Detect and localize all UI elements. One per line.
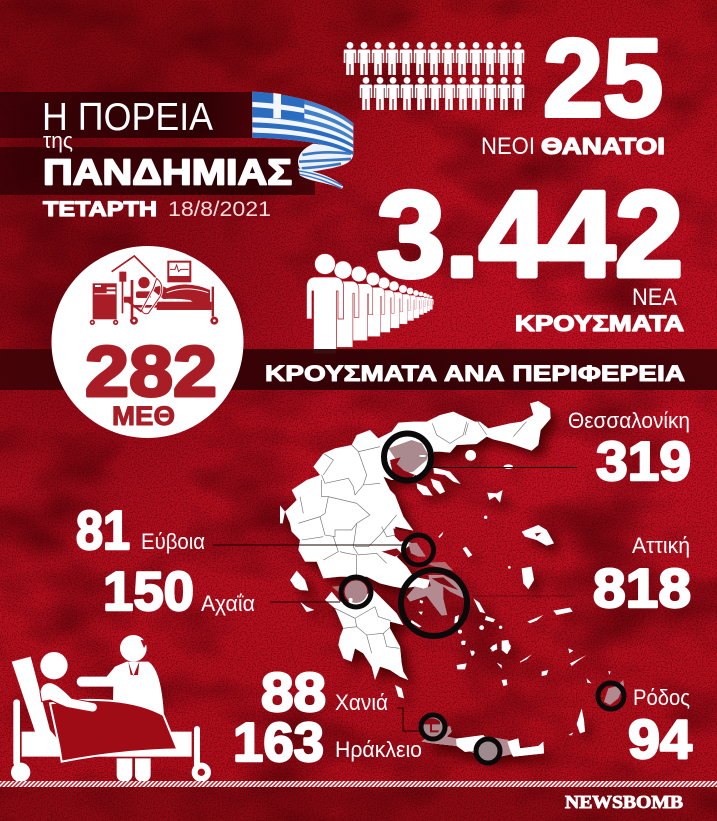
icon: queue of people — [306, 254, 434, 354]
stat: deaths: 25 — [543, 17, 663, 140]
islands: Dodecanese and Crete — [422, 640, 611, 758]
region: Crete and Rhodes — [422, 680, 624, 761]
title block: ΤΕΤΑΡΤΗ — [43, 198, 157, 221]
label: Thessaloniki: Θεσσαλονίκη — [568, 408, 690, 433]
label: Achaia: 150 — [103, 560, 194, 622]
icon: nurse and patient in bed — [11, 630, 211, 782]
region: Achaia — [345, 580, 367, 603]
title block: της — [43, 128, 73, 153]
label: Attica: Αττική — [632, 533, 690, 558]
ICU badge: ΜΕΘ — [112, 401, 175, 431]
stat: deaths: ΝΕΟΙ — [481, 133, 535, 160]
label: Euboea: Εύβοια — [141, 529, 205, 554]
label: Achaia: Αχαΐα — [201, 591, 255, 616]
stat: deaths — [481, 17, 665, 160]
icon: greek flag ribbon — [252, 92, 353, 189]
ICU badge — [52, 246, 244, 438]
label: Attica: 818 — [593, 557, 691, 619]
label: Attica — [593, 533, 691, 619]
region fills — [332, 440, 453, 603]
title block: ΠΑΝΔΗΜΙΑΣ — [43, 152, 292, 192]
label: Chania — [261, 661, 388, 723]
label: Rhodes: Ρόδος — [633, 685, 690, 710]
label: Rhodes: 94 — [628, 708, 692, 770]
label: Heraklion: 163 — [233, 711, 324, 773]
map of Greece — [280, 401, 624, 761]
region: Attica — [407, 575, 464, 627]
hatched divider — [0, 781, 717, 787]
logo: Newsbomb: NEWSBOMB — [565, 792, 683, 812]
label: Euboea: 81 — [76, 499, 130, 561]
label: Chania: Χανιά — [335, 690, 388, 715]
deaths pictogram: 25 figures — [344, 42, 524, 110]
label: Heraklion — [233, 711, 422, 773]
gulf and sea cut-outs — [382, 528, 542, 557]
heading band: cases by region — [0, 349, 717, 390]
region borders — [298, 420, 527, 577]
label: Thessaloniki — [568, 408, 691, 492]
region: Thessaloniki — [388, 440, 428, 473]
highlight circles — [341, 434, 624, 763]
mainland and islands — [280, 401, 611, 758]
title block: 18/8/2021 — [168, 198, 271, 221]
label: Achaia — [103, 560, 255, 622]
stat: new cases: ΚΡΟΥΣΜΑΤΑ — [515, 311, 684, 336]
title block: Η ΠΟΡΕΙΑ — [42, 96, 213, 139]
icon: ICU bed — [90, 256, 218, 325]
region: Euboea — [408, 543, 426, 557]
label: Thessaloniki: 319 — [596, 430, 691, 492]
stat: new cases: ΝΕΑ — [632, 284, 677, 311]
label: Heraklion: Ηράκλειο — [335, 737, 422, 762]
label: Euboea — [76, 499, 205, 561]
label: Chania: 88 — [261, 661, 326, 723]
stat: new cases: 3.442 — [377, 166, 683, 302]
stat: deaths: ΘΑΝΑΤΟΙ — [541, 133, 665, 159]
title block — [0, 92, 315, 221]
leader lines — [213, 468, 577, 755]
ICU badge: 282 — [85, 333, 217, 412]
heading band: cases by region: ΚΡΟΥΣΜΑΤΑ ΑΝΑ ΠΕΡΙΦΕΡΕΙΑ — [265, 361, 685, 386]
label: Rhodes — [628, 685, 692, 770]
